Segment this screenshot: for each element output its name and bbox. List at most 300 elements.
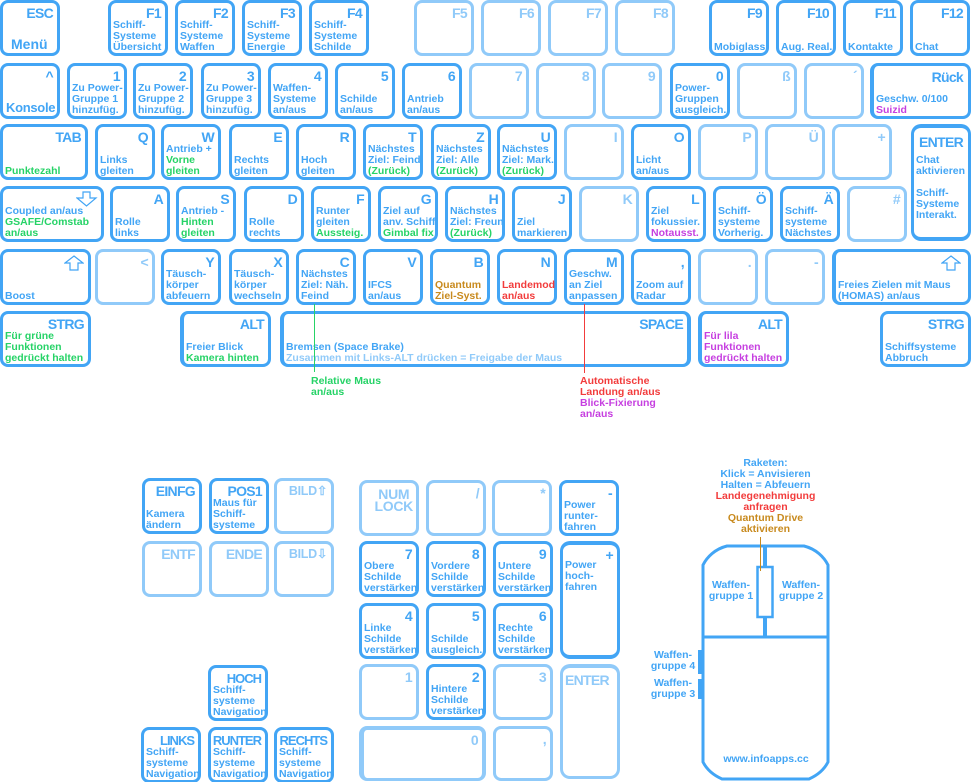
key: Ö: Schiff- bbox=[718, 205, 751, 217]
key: comma: Radar bbox=[636, 290, 666, 302]
key: SPACE: Bremsen (Space Brake) bbox=[286, 341, 404, 353]
key: D: rechts bbox=[249, 227, 281, 239]
key: A: A bbox=[154, 191, 163, 207]
key: ´: ´ bbox=[853, 68, 857, 84]
key: HOCH: HOCH bbox=[227, 671, 261, 686]
key: ESC: ESC bbox=[26, 5, 53, 21]
key: 8 bbox=[536, 63, 596, 119]
key: left ALT bbox=[180, 311, 271, 367]
key: Z: Nächstes bbox=[436, 143, 483, 155]
key: 7: Schilde bbox=[364, 571, 401, 583]
key: minus: - bbox=[814, 254, 818, 270]
key: N bbox=[497, 249, 557, 305]
key: num 2: verstärken bbox=[431, 705, 484, 717]
mouse top callout bbox=[716, 457, 815, 535]
key: POS1: Schiff- bbox=[213, 508, 246, 520]
side buttons bbox=[698, 650, 703, 699]
key: 6: verstärken bbox=[498, 644, 551, 656]
key: 3: 3 bbox=[247, 68, 254, 84]
key: POS1: systeme bbox=[213, 519, 255, 531]
key: 8: Schilde bbox=[431, 571, 468, 583]
key: S: Antrieb - bbox=[181, 205, 224, 217]
key: H: H bbox=[489, 191, 498, 207]
key: right ALT: ALT bbox=[758, 316, 782, 332]
key: H: Nächstes bbox=[450, 205, 497, 217]
key: C bbox=[296, 249, 356, 305]
mouse top callout: Landegenehmigung bbox=[716, 490, 815, 502]
key: T: T bbox=[408, 129, 416, 145]
key: left STRG: Funktionen bbox=[5, 341, 62, 353]
key: U: Nächstes bbox=[502, 143, 549, 155]
key: right STRG bbox=[880, 311, 971, 367]
key: Q: Links bbox=[100, 154, 127, 166]
key: LINKS: Schiff- bbox=[146, 746, 179, 758]
key: 3: Zu Power- bbox=[206, 82, 257, 94]
key: L: fokussier. bbox=[651, 216, 700, 228]
key: POS1: POS1 bbox=[227, 483, 262, 499]
key: num 0: 0 bbox=[471, 732, 478, 748]
key: O: Licht bbox=[636, 154, 661, 166]
key: 6 bbox=[493, 603, 553, 659]
key: BILD down bbox=[274, 541, 334, 597]
label: Waffengruppe 1: gruppe 1 bbox=[709, 590, 753, 602]
key: F4: Schilde bbox=[314, 41, 351, 53]
key: G: Ziel auf bbox=[383, 205, 420, 217]
key: left ALT: Kamera hinten bbox=[186, 352, 259, 364]
key: F4: F4 bbox=[347, 5, 362, 21]
key: left ALT: ALT bbox=[240, 316, 264, 332]
key: RECHTS: Navigation bbox=[279, 768, 333, 780]
key: RUNTER bbox=[208, 727, 268, 782]
key: right ALT bbox=[698, 311, 789, 367]
key: 8: Vordere bbox=[431, 560, 470, 572]
key: 9: Untere bbox=[498, 560, 531, 572]
key: num 0 bbox=[359, 726, 486, 781]
key: J: markieren bbox=[517, 227, 567, 239]
key: X: körper bbox=[234, 279, 267, 291]
key: Ä bbox=[780, 186, 840, 242]
key: E bbox=[229, 124, 289, 180]
key: ß bbox=[737, 63, 797, 119]
key: F6 bbox=[481, 0, 541, 56]
key: RUNTER: systeme bbox=[213, 757, 255, 769]
key: left ALT: Freier Blick bbox=[186, 341, 243, 353]
key: E: E bbox=[273, 129, 282, 145]
key: H: Ziel: Freun bbox=[450, 216, 504, 228]
key: 9: verstärken bbox=[498, 582, 551, 594]
callout: automatic landing: Automatische bbox=[580, 375, 649, 387]
key: Ä: Schiff- bbox=[785, 205, 818, 217]
key: C: Ziel: Näh. bbox=[301, 279, 348, 291]
key: D: D bbox=[288, 191, 297, 207]
keyboard: bottom row bbox=[0, 311, 971, 367]
key: N: N bbox=[541, 254, 550, 270]
key: R: Hoch bbox=[301, 154, 327, 166]
keyboard: function row bbox=[0, 0, 970, 56]
key: T: (Zurück) bbox=[368, 165, 410, 177]
key: V bbox=[363, 249, 423, 305]
key: F3 bbox=[242, 0, 302, 56]
key: left STRG bbox=[0, 311, 91, 367]
key: 9: Schilde bbox=[498, 571, 535, 583]
keyboard: number row bbox=[0, 63, 971, 119]
key: 5: 5 bbox=[381, 68, 388, 84]
key: ENTER: Interakt. bbox=[916, 209, 957, 221]
key: right STRG: STRG bbox=[928, 316, 964, 332]
key: F: Runter bbox=[316, 205, 350, 217]
key: LINKS: LINKS bbox=[160, 733, 194, 748]
key: F: F bbox=[356, 191, 364, 207]
label: Waffengruppe 3 bbox=[651, 677, 695, 700]
key: 6: Rechte bbox=[498, 622, 533, 634]
key: F8: F8 bbox=[653, 5, 668, 21]
key: F11: Kontakte bbox=[848, 41, 893, 53]
key: N: Landemod bbox=[502, 279, 555, 291]
key: R: gleiten bbox=[301, 165, 335, 177]
key: Ä: Nächstes bbox=[785, 227, 832, 239]
key: 4: an/aus bbox=[273, 104, 306, 116]
key: EINFG: Kamera bbox=[146, 508, 185, 520]
key: N: an/aus bbox=[502, 290, 535, 302]
key: R: R bbox=[340, 129, 349, 145]
key: J: J bbox=[558, 191, 565, 207]
label: website: www.infoapps.cc bbox=[723, 753, 809, 765]
key: G: G bbox=[421, 191, 431, 207]
key: <: < bbox=[141, 254, 148, 270]
key: ENTER: Chat bbox=[916, 154, 939, 166]
label: Waffengruppe 4: gruppe 4 bbox=[651, 660, 695, 672]
key: SPACE bbox=[280, 311, 691, 367]
key: A: links bbox=[115, 227, 139, 239]
key: E: Rechts bbox=[234, 154, 269, 166]
key: RECHTS: systeme bbox=[279, 757, 321, 769]
mouse top callout: Klick = Anvisieren bbox=[720, 468, 811, 480]
key: 0: 0 bbox=[716, 68, 723, 84]
key: A: Rolle bbox=[115, 216, 141, 228]
key: right ALT: gedrückt halten bbox=[704, 352, 782, 364]
keyboard: tab row bbox=[0, 124, 892, 180]
key: 2: Gruppe 2 bbox=[138, 93, 184, 105]
key: F2: F2 bbox=[213, 5, 228, 21]
key: 7: verstärken bbox=[364, 582, 417, 594]
key: left Shift: Boost bbox=[5, 290, 35, 302]
key: B: B bbox=[474, 254, 483, 270]
key: B: Quantum bbox=[435, 279, 481, 291]
key: 4: Systeme bbox=[273, 93, 316, 105]
key: Caps Lock: GSAFE/Comstab bbox=[5, 216, 89, 228]
key: L: L bbox=[691, 191, 699, 207]
key: Rück: Geschw. 0/100 bbox=[876, 93, 948, 105]
key: P: P bbox=[742, 129, 751, 145]
key: H: (Zurück) bbox=[450, 227, 492, 239]
key: ESC bbox=[0, 0, 60, 56]
key: A bbox=[110, 186, 170, 242]
key: Q: Q bbox=[138, 129, 148, 145]
key: comma: Zoom auf bbox=[636, 279, 683, 291]
key: num comma: , bbox=[543, 731, 546, 747]
key: L: Notausst. bbox=[651, 227, 699, 239]
key: 5: 5 bbox=[472, 608, 479, 624]
key: W: Vorne bbox=[166, 154, 195, 166]
key: LINKS bbox=[141, 727, 201, 782]
key: I bbox=[564, 124, 624, 180]
key: ^: Konsole bbox=[6, 100, 55, 115]
key: num minus: runter- bbox=[564, 510, 598, 522]
key: F5 bbox=[414, 0, 474, 56]
key: O: O bbox=[674, 129, 684, 145]
key: HOCH: Schiff- bbox=[213, 684, 246, 696]
key: F11 bbox=[843, 0, 903, 56]
key: Z: Z bbox=[476, 129, 484, 145]
key: Ü bbox=[765, 124, 825, 180]
key: C: Nächstes bbox=[301, 268, 348, 280]
key: L: Ziel bbox=[651, 205, 669, 217]
key: period: . bbox=[748, 254, 751, 270]
key: 8 bbox=[426, 541, 486, 597]
key: BILD up: BILD⇧ bbox=[289, 484, 327, 498]
icon: shift arrow bbox=[64, 255, 84, 271]
key: /: / bbox=[476, 485, 479, 501]
key: ENTER: ENTER bbox=[919, 134, 963, 150]
key: comma: , bbox=[681, 254, 684, 270]
key: F1: Schiff- bbox=[113, 19, 146, 31]
key: Caps Lock: an/aus bbox=[5, 227, 38, 239]
key: F2: Systeme bbox=[180, 30, 223, 42]
key: Ü: Ü bbox=[809, 129, 818, 145]
key: B bbox=[430, 249, 490, 305]
key: Y: Täusch- bbox=[166, 268, 206, 280]
key: 9: 9 bbox=[539, 546, 546, 562]
key: F1: F1 bbox=[146, 5, 161, 21]
key: F1 bbox=[108, 0, 168, 56]
key: comma bbox=[631, 249, 691, 305]
key: left Shift bbox=[0, 249, 91, 305]
key: ESC: Menü bbox=[11, 36, 48, 52]
key: * bbox=[492, 480, 552, 536]
key: S: Hinten bbox=[181, 216, 214, 228]
key: 4: 4 bbox=[314, 68, 321, 84]
key: G: Gimbal fix bbox=[383, 227, 434, 239]
key: 2: 2 bbox=[179, 68, 186, 84]
key: Z: (Zurück) bbox=[436, 165, 478, 177]
icon: caps arrow bbox=[76, 191, 98, 207]
key: Ö: Vorherig. bbox=[718, 227, 763, 239]
mouse top callout: Raketen: bbox=[743, 457, 788, 469]
callout: automatic landing bbox=[580, 304, 661, 420]
key: POS1 bbox=[209, 478, 269, 534]
mouse body bbox=[703, 546, 828, 779]
key: F7 bbox=[548, 0, 608, 56]
key: 6: Antrieb bbox=[407, 93, 444, 105]
key: F6: F6 bbox=[519, 5, 534, 21]
key: 4: verstärken bbox=[364, 644, 417, 656]
key: 7: 7 bbox=[405, 546, 412, 562]
key: NUM LOCK: LOCK bbox=[375, 498, 413, 514]
key: RECHTS: RECHTS bbox=[280, 733, 327, 748]
key: RUNTER: RUNTER bbox=[213, 733, 261, 748]
mouse top callout: aktivieren bbox=[741, 523, 790, 535]
key: W: Antrieb + bbox=[166, 143, 212, 155]
key: 2 bbox=[133, 63, 193, 119]
key: F12: F12 bbox=[941, 5, 963, 21]
key: G bbox=[378, 186, 438, 242]
key: Ö: systeme bbox=[718, 216, 760, 228]
key: 3: Gruppe 3 bbox=[206, 93, 252, 105]
scroll wheel bbox=[758, 567, 772, 617]
key: EINFG bbox=[142, 478, 202, 534]
key: num minus: fahren bbox=[564, 521, 596, 533]
key: 8: 8 bbox=[472, 546, 479, 562]
key: F bbox=[311, 186, 371, 242]
key: F1: Übersicht bbox=[113, 41, 161, 53]
key: LINKS: systeme bbox=[146, 757, 188, 769]
key: ß: ß bbox=[782, 68, 790, 84]
key: num plus bbox=[560, 541, 620, 659]
key: Y: Y bbox=[205, 254, 214, 270]
key: 6: 6 bbox=[448, 68, 455, 84]
key: X: Täusch- bbox=[234, 268, 274, 280]
key: O: an/aus bbox=[636, 165, 669, 177]
key: I: I bbox=[614, 129, 617, 145]
key: F3: F3 bbox=[280, 5, 295, 21]
key: 1: Gruppe 1 bbox=[72, 93, 118, 105]
key: 2: Zu Power- bbox=[138, 82, 189, 94]
key: Z: Ziel: Alle bbox=[436, 154, 479, 166]
key: ENTER: Systeme bbox=[916, 198, 959, 210]
key: num 3 bbox=[493, 664, 553, 720]
key: R bbox=[296, 124, 356, 180]
key: 4 bbox=[359, 603, 419, 659]
key: P bbox=[698, 124, 758, 180]
callout: relative mouse: an/aus bbox=[311, 386, 344, 398]
key: 5: an/aus bbox=[340, 104, 373, 116]
key: Rück: Rück bbox=[932, 69, 963, 85]
key: S bbox=[176, 186, 236, 242]
key: F8 bbox=[615, 0, 675, 56]
label: Waffengruppe 2: Waffen- bbox=[782, 579, 820, 591]
key: G: anv. Schiff bbox=[383, 216, 435, 228]
key: 7 bbox=[359, 541, 419, 597]
key: right Shift: (HOMAS) an/aus bbox=[838, 290, 920, 302]
key: + bbox=[832, 124, 892, 180]
key: B: Ziel-Syst. bbox=[435, 290, 482, 302]
key: Y bbox=[161, 249, 221, 305]
key: num minus: Power bbox=[564, 499, 596, 511]
key: right STRG: Abbruch bbox=[885, 352, 928, 364]
key: K: K bbox=[623, 191, 632, 207]
key: V: V bbox=[407, 254, 416, 270]
key: RUNTER: Navigation bbox=[213, 768, 267, 780]
key: left STRG: Für grüne bbox=[5, 330, 54, 342]
navigation block bbox=[141, 478, 334, 782]
key: C: Feind bbox=[301, 290, 329, 302]
key: F12 bbox=[910, 0, 970, 56]
key: num comma bbox=[493, 726, 553, 781]
key: F10 bbox=[776, 0, 836, 56]
key: Rück: Suizid bbox=[876, 104, 907, 116]
key: F2: Waffen bbox=[180, 41, 215, 53]
key: F7: F7 bbox=[586, 5, 601, 21]
callout: automatic landing: Blick-Fixierung bbox=[580, 397, 656, 409]
key: J: Ziel bbox=[517, 216, 535, 228]
key: 6: Schilde bbox=[498, 633, 535, 645]
key: BILD down: BILD⇩ bbox=[289, 547, 327, 561]
key: Y: abfeuern bbox=[166, 290, 210, 302]
key: 9 bbox=[493, 541, 553, 597]
key: Ö bbox=[713, 186, 773, 242]
key: Z bbox=[431, 124, 491, 180]
key: U bbox=[497, 124, 557, 180]
key: V: an/aus bbox=[368, 290, 401, 302]
mouse top callout: Halten = Abfeuern bbox=[721, 479, 810, 491]
numpad bbox=[359, 480, 620, 781]
key: num ENTER bbox=[560, 664, 620, 779]
key: 4: Schilde bbox=[364, 633, 401, 645]
key: left STRG: gedrückt halten bbox=[5, 352, 83, 364]
key: 4: Linke bbox=[364, 622, 391, 634]
key: T: Ziel: Feind bbox=[368, 154, 420, 166]
key: EINFG: EINFG bbox=[156, 483, 195, 499]
key: F9: F9 bbox=[747, 5, 762, 21]
key: 7 bbox=[469, 63, 529, 119]
key: H bbox=[445, 186, 505, 242]
key: 6 bbox=[402, 63, 462, 119]
key: ENTF bbox=[142, 541, 202, 597]
key: M: an Ziel bbox=[569, 279, 602, 291]
key: ENTER bbox=[911, 124, 971, 241]
key: #: # bbox=[893, 191, 900, 207]
key: 7: Obere bbox=[364, 560, 394, 572]
key: SPACE: Zusammen mit Links-ALT drücken = Freigabe der Maus bbox=[286, 352, 562, 364]
key: 6: an/aus bbox=[407, 104, 440, 116]
key: D: Rolle bbox=[249, 216, 275, 228]
key: F2 bbox=[175, 0, 235, 56]
key: 5 bbox=[426, 603, 486, 659]
keyboard: caps row bbox=[0, 186, 907, 242]
label: Waffengruppe 2 bbox=[779, 579, 823, 602]
key: EINFG: ändern bbox=[146, 519, 181, 531]
key: TAB bbox=[0, 124, 88, 180]
key: W bbox=[161, 124, 221, 180]
key: ENTF: ENTF bbox=[161, 546, 195, 562]
key: 9 bbox=[602, 63, 662, 119]
key: RECHTS bbox=[274, 727, 334, 782]
key: Rück bbox=[870, 63, 971, 119]
key: F9: Mobiglass bbox=[714, 41, 765, 53]
key: T: Nächstes bbox=[368, 143, 415, 155]
key: 4: 4 bbox=[405, 608, 412, 624]
key: 1 bbox=[67, 63, 127, 119]
callout: automatic landing: an/aus bbox=[580, 408, 613, 420]
key: F3: Schiff- bbox=[247, 19, 280, 31]
key: num plus: Power bbox=[565, 559, 597, 571]
mouse bbox=[698, 537, 830, 780]
key: U: Ziel: Mark. bbox=[502, 154, 554, 166]
key: 8: 8 bbox=[582, 68, 589, 84]
key: right ALT: Funktionen bbox=[704, 341, 761, 353]
key: num plus: + bbox=[606, 547, 613, 563]
callout: relative mouse: Relative Maus bbox=[311, 375, 381, 387]
key: 5: Schilde bbox=[340, 93, 377, 105]
key: right Shift: Freies Zielen mit Maus bbox=[838, 279, 951, 291]
key: num 2: 2 bbox=[472, 669, 479, 685]
key: HOCH: Navigation bbox=[213, 706, 267, 718]
key: TAB: TAB bbox=[55, 129, 81, 145]
key: num 1: 1 bbox=[405, 669, 412, 685]
key: / bbox=[426, 480, 486, 536]
key: num plus: hoch- bbox=[565, 570, 594, 582]
key: F4: Schiff- bbox=[314, 19, 347, 31]
